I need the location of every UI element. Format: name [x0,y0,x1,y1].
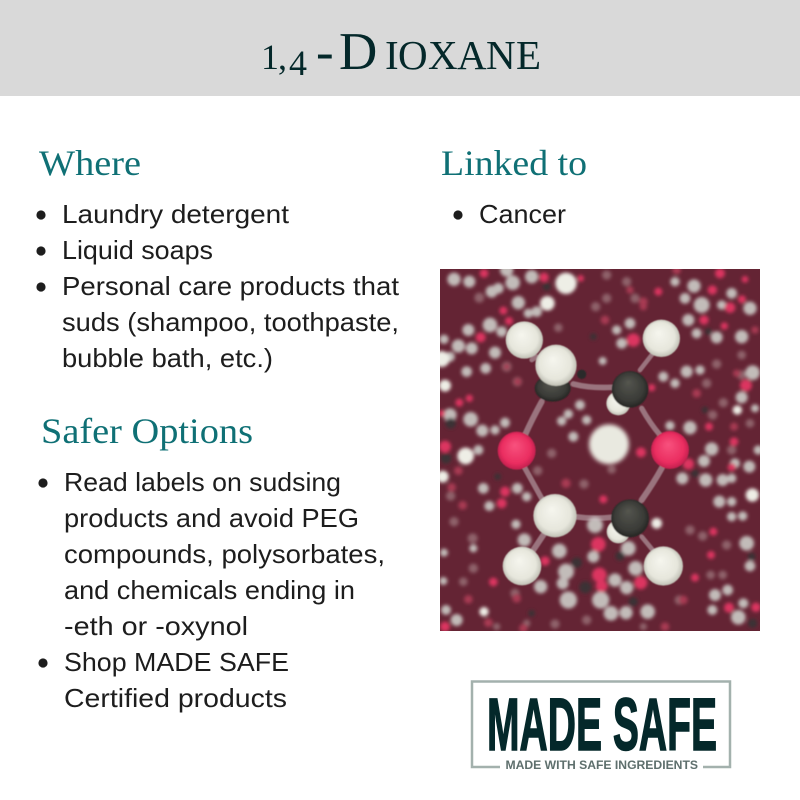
panel: where [36,143,400,373]
title: 1, [261,37,287,77]
list: where products: bubble bath, etc.) [62,343,273,373]
list: where products: suds (shampoo, toothpaste, [62,307,399,337]
list: safer options: Shop MADE SAFE [64,647,289,677]
list: where products: Liquid soaps [62,235,213,265]
atoms [498,320,689,586]
list: safer options: and chemicals ending in [64,575,355,605]
list: safer options: Read labels on sudsing [64,467,341,497]
list: where products: Personal care products that [62,271,400,301]
logo tagline: MADE WITH SAFE INGREDIENTS [506,760,698,772]
list: safer options: compounds, polysorbates, [64,539,385,569]
title: IOXANE [385,32,541,78]
foreground molecule [498,320,689,586]
title banner [0,0,800,96]
title: - [316,23,334,81]
list: safer options: -eth or -oxynol [64,611,248,641]
list: where products [36,199,400,373]
center blurred atom [589,424,629,464]
heading: where: Where [39,143,141,183]
list: safer options: Certified products [64,683,287,713]
atom bonds [525,355,662,550]
panel: linked to [441,143,587,229]
panel: safer options [38,411,385,713]
title: D [339,23,377,81]
image: 1,4-dioxane molecule [434,263,763,633]
heading: safer options: Safer Options [41,411,253,451]
list: safer options: products and avoid PEG [64,503,359,533]
title: 4 [289,43,307,83]
list: safer options [38,467,385,713]
logo: made safe [472,682,730,772]
list: linked conditions: Cancer [479,199,566,229]
heading: linked to: Linked to [441,143,587,183]
list: where products: Laundry detergent [62,199,290,229]
